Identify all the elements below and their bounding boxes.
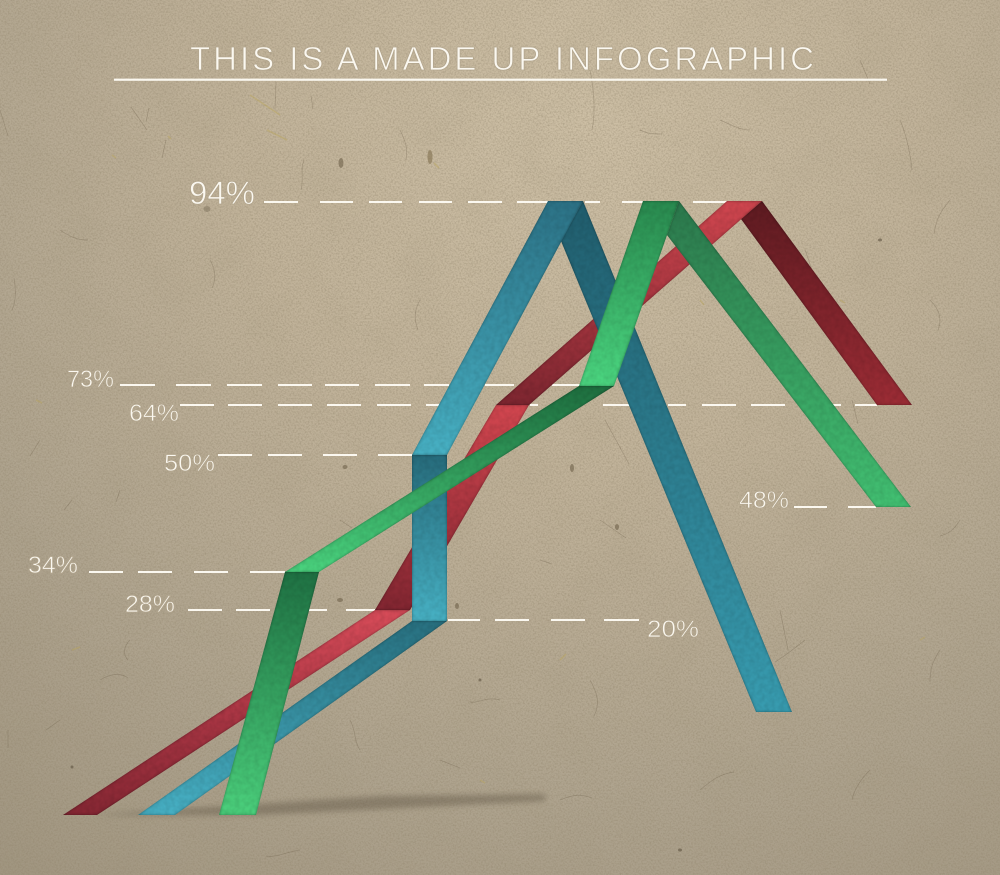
blue fold down to 20% [561, 201, 792, 712]
green rise to 94% [579, 201, 679, 386]
label 20%: 20% [647, 616, 699, 643]
label 73%: 73% [67, 366, 114, 393]
blue rise to 20% [138, 621, 447, 815]
blue ribbon [138, 201, 792, 815]
48% guide line [794, 506, 876, 508]
label 94%: 94% [189, 175, 255, 211]
red rise to 28% [63, 610, 410, 815]
blue vertical rise to 50% [412, 455, 447, 621]
28% guide line [188, 609, 375, 611]
label 48%: 48% [739, 487, 789, 514]
34% guide line [89, 571, 285, 573]
label 34%: 34% [28, 552, 78, 579]
dashed guide lines [89, 201, 877, 621]
50% guide line [218, 454, 412, 456]
percentage labels [28, 175, 789, 643]
green rise to 34% [219, 572, 319, 815]
label 64%: 64% [129, 400, 179, 427]
green ribbon [219, 201, 911, 815]
title: THIS IS A MADE UP INFOGRAPHIC [190, 40, 814, 77]
20% guide line [448, 619, 639, 621]
red rise to 94% [496, 201, 762, 405]
ground shadow [95, 794, 545, 815]
green fold down to 48% [667, 201, 911, 507]
title underline [114, 79, 887, 81]
blue rise to 94% [412, 201, 583, 455]
64% guide line [180, 404, 877, 406]
green rise to 73% [285, 386, 614, 572]
red ribbon [63, 201, 912, 815]
red fold down to 64% [741, 201, 912, 405]
label 50%: 50% [164, 450, 215, 477]
red rise to 64% [375, 405, 529, 610]
label 28%: 28% [125, 591, 175, 618]
94% guide line [264, 201, 727, 203]
73% guide line [120, 384, 580, 386]
